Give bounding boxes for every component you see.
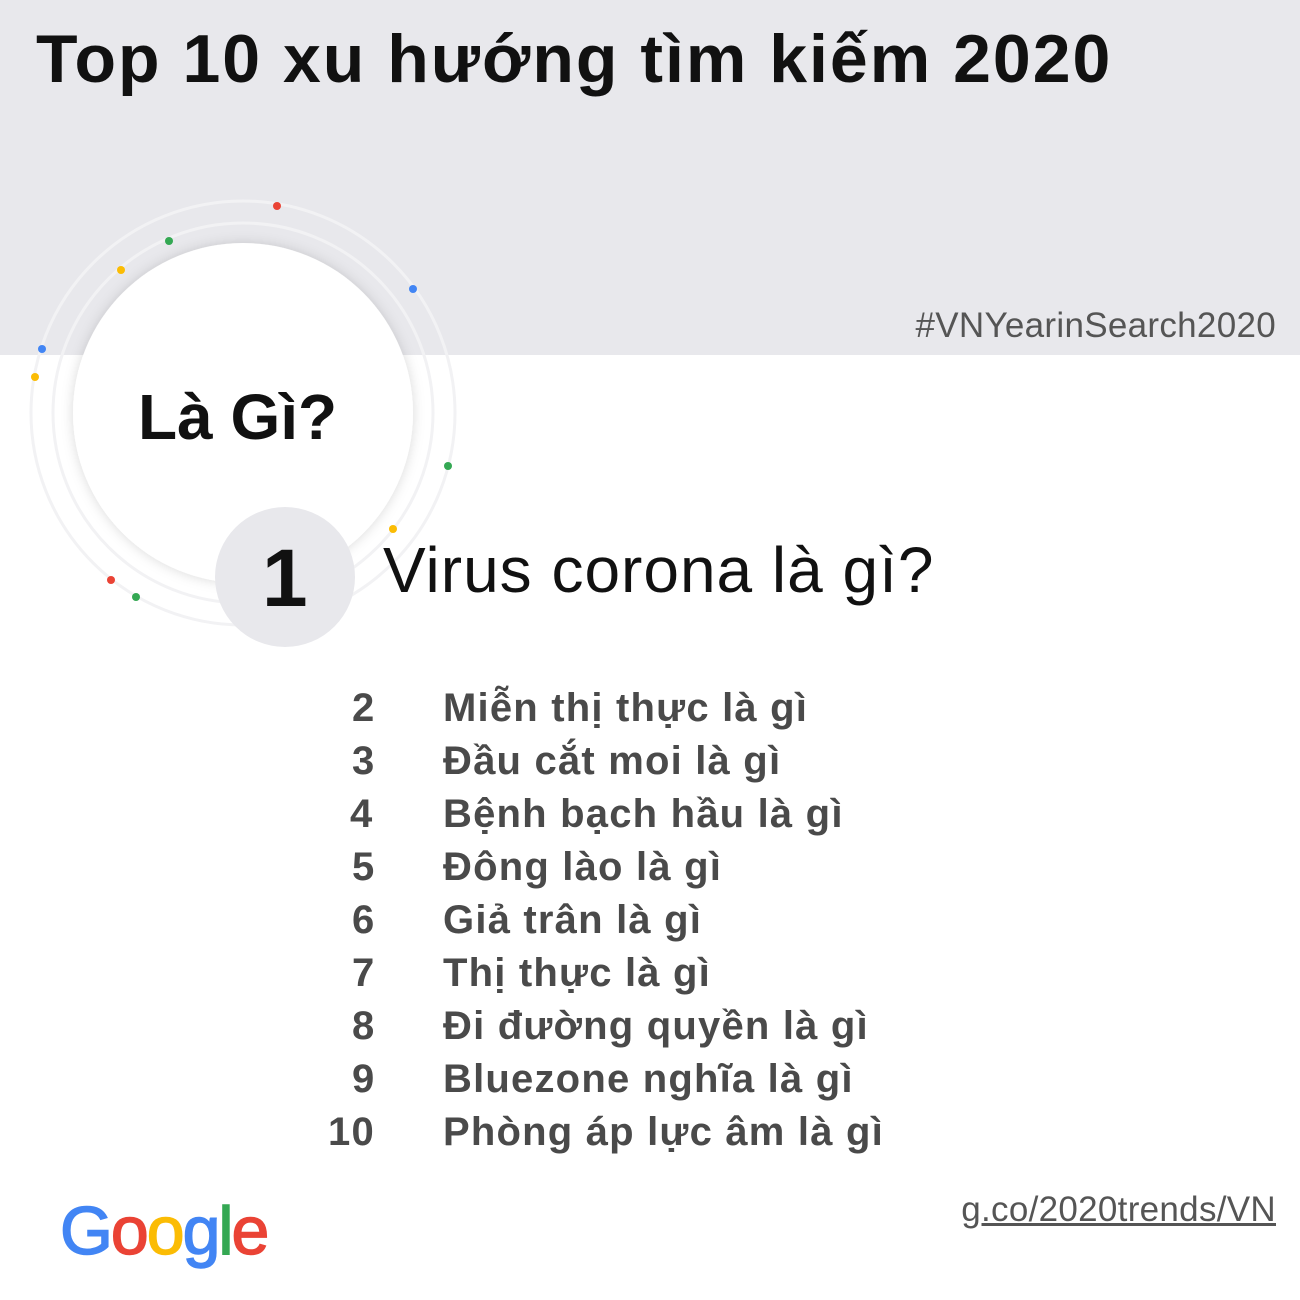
list items 2-10: Đi đường quyền là gì xyxy=(443,1004,869,1048)
list items 2-10: 6 xyxy=(352,898,375,942)
list items 2-10: Bệnh bạch hầu là gì xyxy=(443,792,844,836)
list items 2-10: 4 xyxy=(350,792,373,836)
footer link: g.co/2020trends/VN xyxy=(961,1190,1276,1229)
list items 2-10: Bluezone nghĩa là gì xyxy=(443,1057,854,1101)
top item: Virus corona là gì? xyxy=(383,534,934,606)
list items 2-10: Miễn thị thực là gì xyxy=(443,686,808,730)
list items 2-10: 2 xyxy=(352,686,375,730)
list items 2-10: 9 xyxy=(352,1057,375,1101)
heading: Là Gì?: Là Gì? xyxy=(138,381,337,453)
list items 2-10: Phòng áp lực âm là gì xyxy=(443,1110,884,1154)
graphic: circle with rings xyxy=(30,200,456,647)
number 1: 1 xyxy=(262,533,308,624)
list items 2-10: Đầu cắt moi là gì xyxy=(443,739,781,783)
title: Top 10 xu hướng tìm kiếm 2020 xyxy=(36,21,1112,97)
list items 2-10: Thị thực là gì xyxy=(443,951,711,995)
list items 2-10: 3 xyxy=(352,739,375,783)
list items 2-10: 10 xyxy=(328,1110,375,1154)
hashtag: #VNYearinSearch2020 xyxy=(915,306,1276,345)
list items 2-10: 8 xyxy=(352,1004,375,1048)
list items 2-10: 7 xyxy=(352,951,375,995)
list items 2-10: Giả trân là gì xyxy=(443,898,702,942)
list items 2-10: Đông lào là gì xyxy=(443,845,722,889)
list items 2-10: 5 xyxy=(352,845,375,889)
google logo: Google xyxy=(60,1193,267,1269)
